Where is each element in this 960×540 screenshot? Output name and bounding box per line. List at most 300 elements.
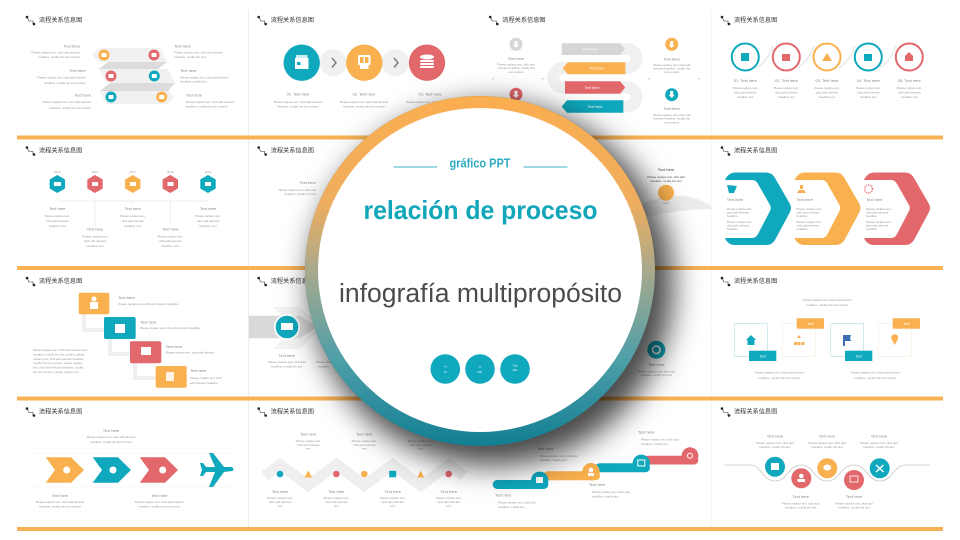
swoosh connectors: [757, 46, 896, 68]
panel: five rings: [721, 16, 923, 99]
top text: headline, modify the text content: [90, 440, 132, 444]
top text: [756, 434, 898, 449]
bottom text: Please replace text, click add relevant: [36, 500, 84, 504]
bottom text: Text here: [272, 489, 289, 494]
panel: hexagon timeline: [26, 146, 221, 248]
box captions: Please replace text, click: [190, 376, 222, 380]
right icons and text: Text here: [663, 56, 681, 62]
heading: [721, 146, 777, 156]
bottom text: Please replace text,: [380, 496, 406, 500]
panel: gear step: [638, 341, 675, 377]
arrow bars: Text here: [588, 105, 602, 109]
timeline text: headline, text: [49, 224, 66, 228]
bottom text: Text here: [440, 489, 458, 494]
bottom text: click add relevant: [325, 500, 348, 504]
bottom text: Please replace text, click add: [782, 502, 820, 506]
heading: [26, 16, 82, 25]
text block: [268, 353, 336, 368]
three teal badges: N: [444, 364, 446, 368]
timeline text: click add relevant: [122, 219, 144, 223]
year labels: 2016: [92, 170, 99, 174]
label tabs: Text: [903, 322, 910, 326]
bottom text: headline, modify the text content: [138, 504, 180, 508]
panel: stepped bars: [493, 430, 698, 509]
heading: 流程关系信息图: [734, 277, 777, 285]
step text: headline, modify text: [592, 495, 619, 499]
left icons and text: Please replace text, click add: [497, 62, 535, 66]
left text blocks: Text here: [75, 92, 92, 98]
bottom text: [782, 494, 873, 510]
text block: [647, 167, 685, 183]
step captions: 01. Text here: [286, 92, 310, 96]
heading: [721, 277, 777, 286]
ring captions: click add relevant: [775, 90, 798, 94]
heading: [26, 407, 82, 417]
step captions: Please replace text, click add relevant: [406, 100, 454, 104]
ring captions: 02. Text here: [775, 78, 799, 83]
top text: Please replace text, click add: [860, 441, 898, 445]
paragraph: Please replace text, click add relevant text,: [33, 348, 88, 352]
chevron text: click add relevant: [796, 210, 819, 214]
arrow band: [249, 307, 322, 349]
left text blocks: headline, modify the text content: [49, 106, 91, 110]
heading: 流程关系信息: [271, 277, 308, 285]
year labels: 2017: [129, 170, 136, 174]
ring icons: [732, 44, 923, 70]
heading: 流程关系信息图: [39, 408, 82, 416]
step captions: [274, 92, 454, 108]
step captions: headline, modify the text content: [277, 104, 319, 108]
right icons and text: text content: [664, 120, 679, 124]
subtitle with rules: gráfico PPT: [450, 156, 511, 170]
label tabs: Text: [855, 354, 862, 358]
icon: coins circle: [409, 44, 445, 81]
chevron text: headline: [866, 227, 877, 231]
chevron text: Text here: [796, 197, 814, 202]
panel: three circle flow: [257, 16, 454, 109]
ring captions: click add relevant: [816, 90, 838, 94]
text block: [279, 180, 317, 196]
heading: 流程关系信息图: [39, 146, 82, 154]
panel: ribbon process: [26, 16, 234, 110]
ring captions: 04. Text here: [857, 78, 881, 83]
bottom text: text: [390, 504, 395, 508]
top text: Please replace text, click add: [756, 441, 794, 445]
right text blocks: [174, 44, 234, 108]
orange chevron: [794, 172, 860, 245]
paragraph: headline, modify the text content, please: [33, 352, 85, 356]
bottom text: Please replace text, click add relevant: [851, 371, 900, 375]
bottom text: click add relevant: [382, 500, 404, 504]
top text: Text here: [871, 434, 888, 438]
chevron text: headline: [796, 227, 808, 231]
text block: Text here: [658, 167, 675, 172]
zigzag icons: [277, 470, 452, 478]
framed boxes: [734, 323, 912, 357]
timeline text: Please replace text,: [45, 214, 70, 218]
top text: headline, modify the text content: [806, 303, 848, 307]
right text blocks: Please replace text, click add relevant: [180, 76, 229, 80]
central badge: [305, 96, 655, 446]
timeline text: headline, text: [162, 244, 179, 248]
paragraph: replace text, click add relevant headline,: [33, 357, 85, 361]
right text blocks: headline, modify the text content: [186, 104, 228, 108]
paragraph: the text content, please replace text: [33, 370, 79, 374]
top text: text: [418, 446, 423, 450]
icon: shop circle: [284, 44, 320, 81]
panel: serpentine arrows: [489, 16, 700, 125]
step captions: 02. Text here: [352, 92, 376, 96]
bottom text: [755, 371, 900, 380]
left text blocks: Please replace text, click add relevant: [37, 76, 86, 80]
bottom text: [267, 489, 462, 508]
label tabs: [749, 318, 920, 361]
text block: Text here: [648, 362, 665, 367]
arrow bars: Text here: [585, 86, 599, 90]
bottom text: text: [446, 504, 451, 508]
step text: Text here: [537, 446, 554, 451]
timeline text: click add relevant: [46, 219, 69, 223]
bottom text: Please replace text, click add relevant: [755, 371, 804, 375]
right icons and text: Please replace text, click add: [653, 113, 691, 117]
left text blocks: headline, modify the text content: [44, 81, 86, 85]
left text blocks: Text here: [69, 68, 86, 73]
top text: Please replace text, click add relevant: [803, 298, 852, 302]
bottom text: headline, modify the text content: [854, 376, 896, 380]
arrow bars: Text here: [590, 66, 604, 70]
top text: headline, modify the text: [863, 445, 895, 449]
bottom text: Text here: [384, 489, 402, 494]
left text blocks: [31, 44, 92, 110]
heading: [26, 146, 82, 156]
left text blocks: headline, modify the text content: [38, 55, 80, 59]
step captions: Please replace text, click add relevant: [274, 100, 322, 104]
process chevrons: [46, 457, 178, 483]
step captions: Please replace text, click add relevant: [340, 100, 388, 104]
top text: Please replace text, click add relevant: [87, 435, 135, 439]
top text: Text here: [819, 434, 836, 438]
chevron text: click add relevant: [796, 224, 819, 228]
chevron text: click add relevant: [866, 224, 889, 228]
top text: click add relevant: [410, 443, 432, 447]
text block: Text here: [278, 353, 296, 358]
heading: [721, 407, 777, 417]
text block: headline, modify the text: [641, 373, 672, 377]
icon: people circle: [274, 314, 300, 340]
paragraph: modify the text content, please replace: [33, 361, 83, 365]
drop shadow of central badge: [305, 96, 655, 446]
wave icons: [765, 457, 890, 490]
timeline text: Please replace text,: [158, 234, 183, 238]
ring captions: click add relevant: [734, 90, 757, 94]
chevron icons: [727, 185, 872, 193]
bottom text: click add relevant: [438, 500, 460, 504]
heading: [257, 407, 314, 417]
bottom text: text: [334, 504, 339, 508]
top text: Text here: [300, 432, 317, 436]
bottom text: Text here: [52, 493, 69, 498]
bottom text: Please replace text,: [267, 496, 293, 500]
bottom text: Text here: [792, 494, 810, 499]
step text: Please replace text, click add: [641, 438, 679, 442]
zigzag band: [265, 464, 464, 486]
bottom text: [36, 493, 184, 508]
ring captions: click add relevant: [857, 90, 880, 94]
connector arrows: [320, 49, 409, 76]
icon: gear circle: [647, 341, 665, 359]
top text: [296, 432, 434, 450]
top text: Please replace text,: [352, 439, 377, 443]
hexagon icons: [50, 175, 216, 193]
right text blocks: Please replace text, click add relevant: [186, 100, 234, 104]
step text: headline, modify text: [540, 458, 567, 462]
box captions: Text here: [190, 368, 207, 373]
right icons and text: Text here: [663, 106, 681, 111]
text block: [638, 362, 675, 377]
year labels: 2019: [205, 170, 212, 174]
left icons and text: [492, 38, 543, 101]
heading: 流程关系信息图: [734, 146, 777, 154]
year labels: [54, 170, 212, 174]
top text: Please replace text,: [408, 439, 434, 443]
step text: Text here: [495, 492, 512, 498]
ring captions: headline text: [860, 95, 877, 99]
panel: staircase boxes: [26, 277, 222, 388]
ring captions: [733, 78, 922, 99]
right icons and text: relevant headline, modify the: [653, 116, 691, 120]
bottom text: Text here: [151, 493, 168, 498]
top text: text: [306, 446, 311, 450]
step text: [495, 430, 679, 509]
right icons and text: text content: [664, 70, 679, 74]
text block: Please replace text, click add: [279, 188, 316, 192]
ring captions: Please replace text,: [814, 86, 840, 90]
left icons and text: Text here: [508, 56, 525, 61]
chevron text: Please replace text,: [796, 220, 822, 224]
text block: Please replace text, click add: [638, 370, 675, 374]
timeline text: click add relevant: [197, 219, 219, 223]
box captions: Text here: [166, 344, 183, 349]
timeline text: headline, text: [199, 224, 217, 228]
heading: 流程关系信息图: [734, 16, 777, 24]
right text blocks: headline, modify the text: [174, 55, 206, 59]
right text blocks: Text here: [174, 44, 192, 48]
box captions: Please replace text, click add relevant headline: [118, 302, 179, 306]
panel: four framed icons: [721, 277, 920, 380]
right icons and text: relevant headline, modify the: [653, 66, 691, 70]
bottom text: click add relevant: [269, 500, 291, 504]
top text: [87, 428, 135, 444]
stepped pills: [493, 447, 698, 489]
text block: Please replace: [316, 360, 336, 364]
label tabs: Text: [759, 354, 766, 358]
chevron text: headline: [796, 214, 808, 218]
ring captions: Please replace text,: [733, 86, 758, 90]
chevron text: click add relevant: [727, 224, 749, 228]
year labels: 2015: [54, 170, 61, 174]
timeline text: Please replace text,: [82, 234, 108, 238]
text block: Please replace text, click add: [647, 175, 685, 179]
text block: Text here: [300, 180, 317, 185]
bottom text: Please replace text,: [324, 496, 349, 500]
left icons and text: relevant headline, modify the: [498, 66, 535, 70]
bottom text: Text here: [328, 489, 345, 494]
bottom text: headline, modify the text: [785, 506, 817, 510]
right text blocks: Text here: [186, 92, 203, 98]
ribbon bands: [92, 48, 175, 104]
timeline text: Please replace text,: [120, 214, 146, 218]
chevron text: Please replace text,: [866, 220, 892, 224]
box captions: Text here: [118, 295, 136, 300]
top text: Text here: [356, 432, 373, 436]
ring captions: 05. Text here: [898, 78, 922, 83]
timeline text: Text here: [162, 226, 179, 232]
right icons and text: Please replace text, click add: [653, 63, 691, 67]
right text blocks: Please replace text, click add relevant: [174, 50, 223, 54]
serpentine track: [553, 49, 636, 106]
bottom text: Text here: [846, 494, 863, 499]
box icons: [746, 334, 898, 346]
heading: 流程关系信息图: [39, 16, 82, 24]
chevron text: Please replace text,: [796, 207, 822, 211]
step text: Please replace text, click add: [498, 500, 536, 504]
heading: 流程关系信息图: [502, 16, 546, 24]
text block: headline, modify the text: [285, 192, 316, 196]
heading: 流程关系信息图: [734, 408, 777, 416]
chevron text: headline: [727, 214, 738, 218]
ring captions: headline text: [901, 95, 918, 99]
bottom text: headline, modify the text content: [39, 504, 81, 508]
gradient ring: [305, 96, 655, 446]
timeline text: click add relevant: [159, 239, 182, 243]
ribbon icons: [98, 50, 167, 102]
left icons and text: text content: [509, 70, 524, 74]
box captions: [118, 295, 222, 385]
panel: partly hidden slide: [257, 146, 317, 196]
timeline text: Please replace text,: [195, 214, 221, 218]
step text: headline, modify text: [641, 442, 668, 446]
timeline text: Text here: [124, 206, 142, 211]
step text: Text here: [638, 430, 655, 434]
text block: headline: [318, 364, 329, 368]
icon: airplane: [200, 453, 234, 487]
box icons: [79, 293, 187, 388]
orange circle: 2018: [663, 201, 670, 205]
red chevron: [864, 172, 930, 245]
three teal badges: %: [444, 370, 447, 374]
flight lines: [30, 453, 235, 487]
bottom text: Please replace text, click add relevant: [135, 500, 184, 504]
right text blocks: headline, modify text: [180, 80, 207, 84]
ring captions: 03. Text here: [815, 78, 839, 83]
text block: headline, modify the text: [271, 364, 303, 368]
heading: [721, 16, 777, 25]
timeline text: headline, text: [124, 224, 141, 228]
panel: swoosh with orange circle: [640, 167, 712, 218]
box connectors: [84, 314, 156, 378]
top text: headline, modify the text: [811, 445, 843, 449]
timeline text: click add relevant: [84, 239, 106, 243]
three teal badges: Top: [513, 364, 518, 368]
box captions: Please replace text, click add relevant: [166, 350, 214, 354]
timeline text: Text here: [87, 226, 104, 232]
ring captions: headline text: [737, 95, 754, 99]
chevron text: click add relevant: [866, 210, 889, 214]
heading: [489, 16, 546, 25]
top text: Text here: [103, 428, 120, 433]
ring captions: headline text: [778, 95, 795, 99]
chevron text: Please replace text,: [727, 207, 752, 211]
top text: Please replace text, click add: [808, 441, 846, 445]
three teal badges: [430, 354, 530, 384]
text block: Please replace text, click add: [268, 360, 306, 364]
gray swoosh: [640, 196, 712, 218]
bottom text: Please replace text, click add: [835, 502, 873, 506]
step text: Text here: [589, 482, 606, 487]
arrow bars: [562, 43, 625, 113]
timeline text: [45, 206, 221, 248]
top text: Please replace text,: [296, 439, 321, 443]
heading: [257, 16, 314, 25]
top text: click add relevant: [353, 443, 376, 447]
bottom text: headline, modify the text: [838, 506, 870, 510]
chevron text: headline: [866, 214, 877, 218]
step text: Please replace text, click add: [592, 490, 630, 494]
three teal badges: m: [479, 364, 482, 368]
white disc: [318, 108, 642, 432]
teal chevron: [725, 172, 791, 245]
heading: 流程关系信息图: [271, 146, 314, 154]
chevron text: [727, 197, 892, 231]
main title: relación de proceso: [364, 195, 598, 225]
panel: chevrons and plane: [26, 407, 235, 508]
top text: [803, 298, 852, 307]
arrow bars: Text here: [583, 48, 597, 52]
bottom text: text: [278, 504, 283, 508]
chevron text: Text here: [727, 197, 744, 202]
paragraph: [33, 348, 88, 374]
year labels: 2018: [167, 170, 174, 174]
step text: Please replace text, click add: [540, 454, 578, 458]
top text: click add relevant: [297, 443, 320, 447]
chevron text: Please replace text,: [727, 220, 752, 224]
ring captions: Please replace text,: [897, 86, 922, 90]
panel: wave circles: [721, 407, 930, 510]
left text blocks: Please replace text, click add relevant: [31, 50, 80, 54]
box captions: Please replace text, click add relevant headline: [140, 326, 201, 330]
label tabs: Text: [807, 322, 814, 326]
panel: zigzag process: [257, 407, 464, 508]
step text: headline, modify text: [498, 505, 525, 509]
top text: headline, modify the text: [759, 445, 791, 449]
three teal badges: title: [478, 370, 483, 374]
timeline text: headline, text: [86, 244, 104, 248]
heading: 流程关系信息图: [39, 277, 82, 285]
timeline text: Text here: [200, 206, 217, 211]
timeline text: Text here: [49, 206, 66, 211]
ring captions: headline text: [819, 95, 835, 99]
bottom text: Please replace text,: [436, 496, 462, 500]
ring captions: 01. Text here: [734, 78, 758, 83]
three teal badges: title: [513, 368, 518, 372]
wave line: [724, 465, 930, 481]
left text blocks: Text here: [64, 44, 81, 48]
chevron text: click add relevant: [727, 210, 749, 214]
ring captions: Please replace text,: [856, 86, 881, 90]
box captions: add relevant headline: [190, 381, 218, 385]
secondary title: infografía multipropósito: [339, 280, 622, 308]
step captions: 03. Text here: [418, 92, 442, 96]
